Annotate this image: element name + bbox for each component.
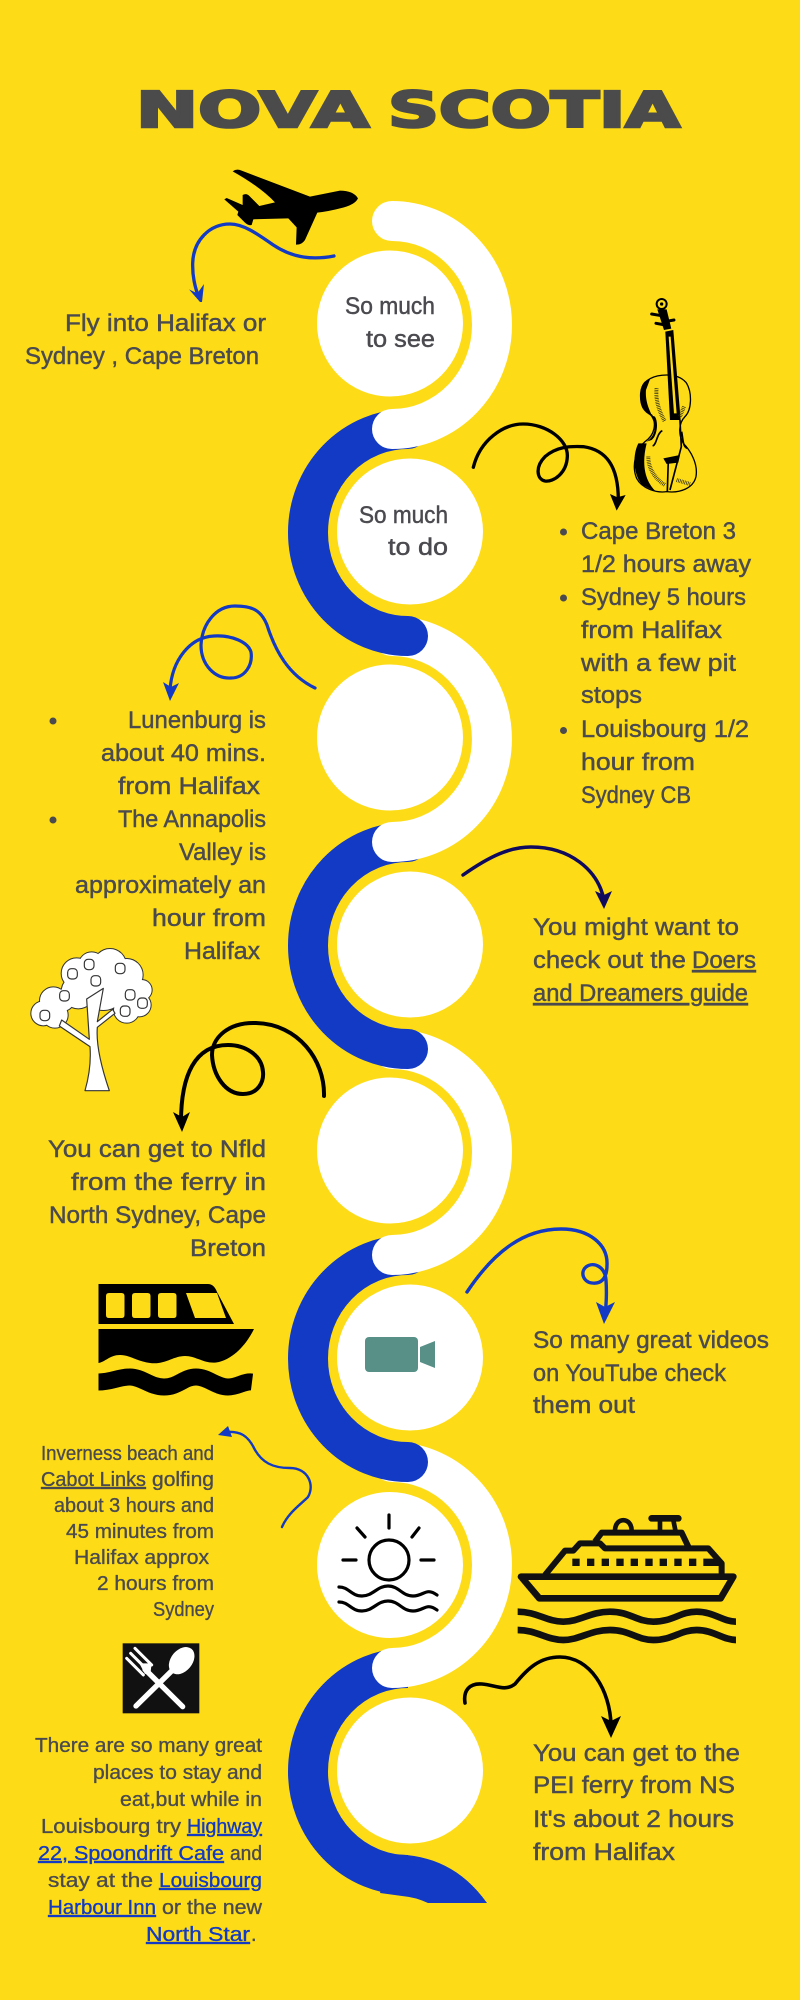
text: places to stay and eat: Harbour Inn (48, 1897, 156, 1919)
bullet list: Lunenburg and Annapolis Valley: about 40 mins. (101, 740, 266, 767)
white arc 1 (392, 221, 492, 429)
bullet list: Lunenburg and Annapolis Valley: from Halifax (118, 773, 260, 800)
white arc 4 (392, 1462, 492, 1668)
circle 1: so much to see: to see (366, 326, 435, 353)
text: places to stay and eat (35, 1735, 263, 1946)
text: Doers and Dreamers (533, 914, 756, 1007)
circle 3 (317, 664, 463, 810)
text: Inverness beach and Cabot Links: golfing (152, 1469, 214, 1491)
text: Newfoundland ferry: North Sydney, Cape (49, 1202, 266, 1229)
text: Newfoundland ferry: from the ferry in (71, 1169, 266, 1196)
bullet list: Cape Breton distances: from Halifax (581, 617, 722, 644)
text: YouTube videos: So many great videos (533, 1327, 769, 1354)
bullet list: Cape Breton distances: Louisbourg 1/2 (581, 716, 749, 743)
text: Inverness beach and Cabot Links: Halifax approx (74, 1547, 209, 1569)
text: places to stay and eat: and (230, 1843, 262, 1865)
text: PEI ferry: You can get to the (533, 1740, 740, 1767)
text: fly into: Sydney , Cape Breton (25, 343, 259, 370)
bullet list: Cape Breton distances: hour from (581, 749, 695, 776)
circle 2: so much to do (337, 458, 483, 604)
text: PEI ferry: PEI ferry from NS (533, 1772, 735, 1799)
bullet list: Cape Breton distances (560, 518, 751, 809)
circle 6 with video icon (337, 1284, 483, 1430)
text: Inverness beach and Cabot Links: Sydney (153, 1599, 214, 1621)
text: Newfoundland ferry: You can get to Nfld (48, 1136, 266, 1163)
arrow: blue loop to Lunenburg (163, 606, 315, 701)
bullet list: Lunenburg and Annapolis Valley: Lunenburg is (128, 707, 266, 734)
arrow: navy curve to guide (463, 847, 612, 909)
icon: airplane (224, 170, 358, 245)
text: Inverness beach and Cabot Links: Cabot Links (41, 1469, 146, 1491)
title: NOVA (136, 82, 369, 139)
circle 2: so much to do: to do (388, 534, 448, 561)
bullet list: Cape Breton distances: stops (581, 682, 642, 709)
text: places to stay and eat: . (251, 1924, 257, 1946)
icon: violin (634, 299, 696, 492)
icon: apple tree (31, 949, 152, 1091)
circle 5 (317, 1078, 463, 1224)
icon: ferry boat (98, 1284, 254, 1387)
text: places to stay and eat: places to stay and (93, 1762, 262, 1784)
title (136, 82, 680, 139)
text: Doers and Dreamers: You might want to (533, 914, 739, 941)
text: Inverness beach and Cabot Links: 45 minutes from (66, 1521, 214, 1543)
bullet list: Lunenburg and Annapolis Valley: Halifax (184, 938, 260, 965)
text: YouTube videos: them out (533, 1392, 635, 1419)
text: Newfoundland ferry: Breton (190, 1235, 266, 1262)
text: YouTube videos (533, 1327, 769, 1419)
text: Inverness beach and Cabot Links: about 3 hours and (54, 1495, 214, 1517)
bullet list: Cape Breton distances: with a few pit (580, 650, 736, 677)
text: Inverness beach and Cabot Links: 2 hours from (97, 1573, 214, 1595)
text: places to stay and eat: North Star (146, 1924, 250, 1946)
text: Inverness beach and Cabot Links: Inverness beach and (41, 1443, 214, 1465)
circle 2: so much to do: So much (359, 502, 448, 529)
text: places to stay and eat: stay at the (48, 1870, 153, 1892)
text: Doers and Dreamers: Doers (692, 947, 756, 974)
bullet list: Lunenburg and Annapolis Valley: approximately an (75, 872, 266, 899)
circle 7 with sun icon (317, 1492, 463, 1638)
icon: fork and spoon (123, 1642, 200, 1713)
bullet list: Lunenburg and Annapolis Valley: The Annapolis (118, 806, 266, 833)
text: PEI ferry (533, 1740, 740, 1866)
blue arc 5 with tail (308, 1668, 487, 1903)
white arc 3 (392, 1049, 492, 1255)
bullet list: Cape Breton distances: 1/2 hours away (581, 551, 751, 578)
text: fly into (25, 310, 266, 370)
blue arc 4 (308, 1255, 408, 1462)
circle 8 (337, 1698, 483, 1844)
bullet list: Cape Breton distances: Cape Breton 3 (581, 518, 736, 545)
text: Newfoundland ferry (48, 1136, 266, 1262)
text: places to stay and eat: 22, Spoondrift Cafe (38, 1843, 224, 1865)
white arc 2 (392, 636, 492, 842)
arrow: plane to Halifax (189, 224, 334, 302)
circle 1: so much to see (317, 250, 463, 396)
text: places to stay and eat: There are so many great (35, 1735, 262, 1757)
title: SCOTIA (388, 82, 680, 139)
bullet list: Lunenburg and Annapolis Valley: hour from (152, 905, 266, 932)
text: places to stay and eat: eat,but while in (120, 1789, 262, 1811)
text: Doers and Dreamers: and Dreamers guide (533, 980, 748, 1007)
circle 4 (337, 872, 483, 1018)
text: Inverness beach and Cabot Links (41, 1443, 214, 1621)
text: YouTube videos: on YouTube check (533, 1360, 727, 1387)
text: fly into: Fly into Halifax or (65, 310, 266, 337)
circle 1: so much to see: So much (345, 293, 435, 320)
bullet list: Cape Breton distances: Sydney 5 hours (581, 584, 746, 611)
bullet list: Lunenburg and Annapolis Valley: Valley is (179, 839, 266, 866)
icon: cruise ship (518, 1518, 736, 1640)
bullet list: Cape Breton distances: Sydney CB (581, 782, 691, 809)
text: places to stay and eat: Louisbourg try (41, 1816, 181, 1838)
arrow: black loop to Nfld (173, 1023, 324, 1132)
arrow: blue curve to videos (467, 1229, 615, 1324)
text: PEI ferry: from Halifax (533, 1839, 675, 1866)
bullet list: Lunenburg and Annapolis Valley (50, 707, 266, 965)
arrow: black curve to PEI ferry (465, 1657, 621, 1738)
arrow: violin curl (473, 424, 626, 511)
text: PEI ferry: It's about 2 hours (533, 1806, 734, 1833)
text: places to stay and eat: Louisbourg (159, 1870, 262, 1892)
text: Doers and Dreamers: check out the (533, 947, 686, 974)
blue arc 1 (308, 429, 408, 636)
arrow: blue curve to Inverness (218, 1426, 311, 1527)
text: places to stay and eat: or the new (162, 1897, 263, 1919)
text: places to stay and eat: Highway (187, 1816, 262, 1838)
blue arc 3 (308, 842, 408, 1049)
